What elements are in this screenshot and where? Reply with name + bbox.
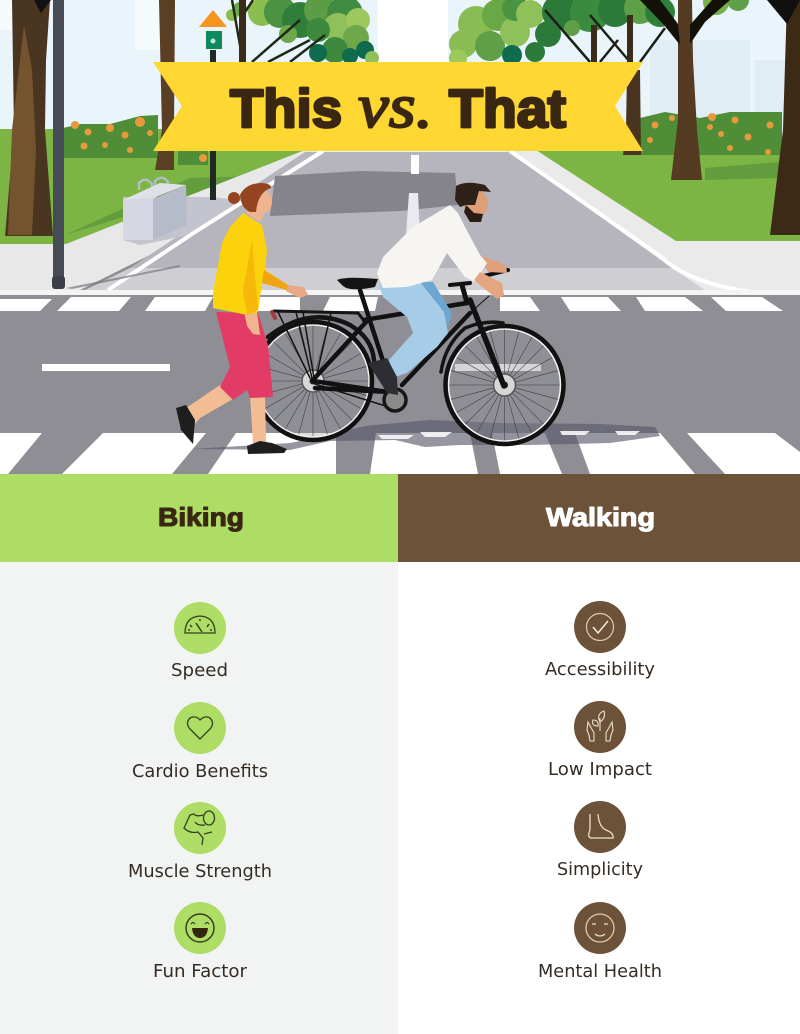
title: That (449, 79, 566, 139)
item: muscle strength: Muscle Strength (128, 862, 272, 882)
grass (0, 129, 800, 244)
bicycle (254, 270, 564, 444)
foreground tree left (5, 0, 53, 236)
orange flower hedges (63, 112, 782, 165)
item: simplicity (557, 801, 643, 880)
shoes (176, 405, 195, 444)
crosswalk stripes (0, 297, 800, 474)
panel: walking column (398, 474, 800, 1034)
left background tree canopy (226, 0, 379, 65)
legs (250, 395, 266, 443)
hand and wrist (474, 272, 504, 299)
rear wheel (254, 322, 372, 440)
trousers (216, 312, 273, 400)
hand (286, 285, 308, 298)
title: This (230, 79, 342, 139)
item: low impact: Low Impact (548, 760, 652, 780)
item: muscle strength (128, 802, 272, 882)
foreground tree right (640, 0, 800, 235)
shirt (377, 205, 487, 288)
front wheel (446, 326, 564, 444)
item: speed: Speed (171, 661, 228, 681)
item: fun factor: Fun Factor (153, 962, 248, 982)
lamp post (52, 0, 65, 289)
head (455, 183, 491, 222)
heading: walking: Walking (546, 502, 655, 532)
title (230, 73, 566, 141)
title: vs. (358, 73, 433, 141)
sky and skyline (0, 0, 800, 160)
saddle (337, 278, 378, 289)
planter box (123, 178, 187, 240)
head (228, 183, 272, 222)
street scene illustration (0, 0, 800, 474)
far arm (479, 255, 507, 273)
item: low impact (548, 701, 652, 780)
street sign (199, 10, 227, 200)
item: simplicity: Simplicity (557, 860, 643, 880)
sweater (213, 213, 288, 315)
pavement and road (0, 150, 800, 474)
banner ribbon (153, 62, 643, 151)
item: fun factor (153, 902, 248, 982)
frame (313, 270, 508, 411)
item: mental health: Mental Health (538, 962, 662, 982)
fenders and rack (268, 311, 503, 378)
item: cardio benefits: Cardio Benefits (132, 762, 268, 782)
heading: biking: Biking (158, 502, 244, 532)
cyclist (368, 183, 507, 395)
walking woman (176, 183, 308, 454)
jeans (378, 282, 452, 377)
right background tree canopy (449, 0, 749, 67)
shoe (368, 358, 398, 395)
item: accessibility: Accessibility (545, 660, 655, 680)
heading: biking (0, 474, 398, 562)
item: cardio benefits (132, 702, 268, 782)
item: accessibility (545, 601, 655, 680)
item: speed (171, 602, 228, 681)
panel: biking column (0, 474, 398, 1034)
bicycle shadow (192, 420, 660, 450)
background trunks (155, 0, 641, 170)
heading: walking (398, 474, 800, 562)
item: mental health (538, 902, 662, 982)
